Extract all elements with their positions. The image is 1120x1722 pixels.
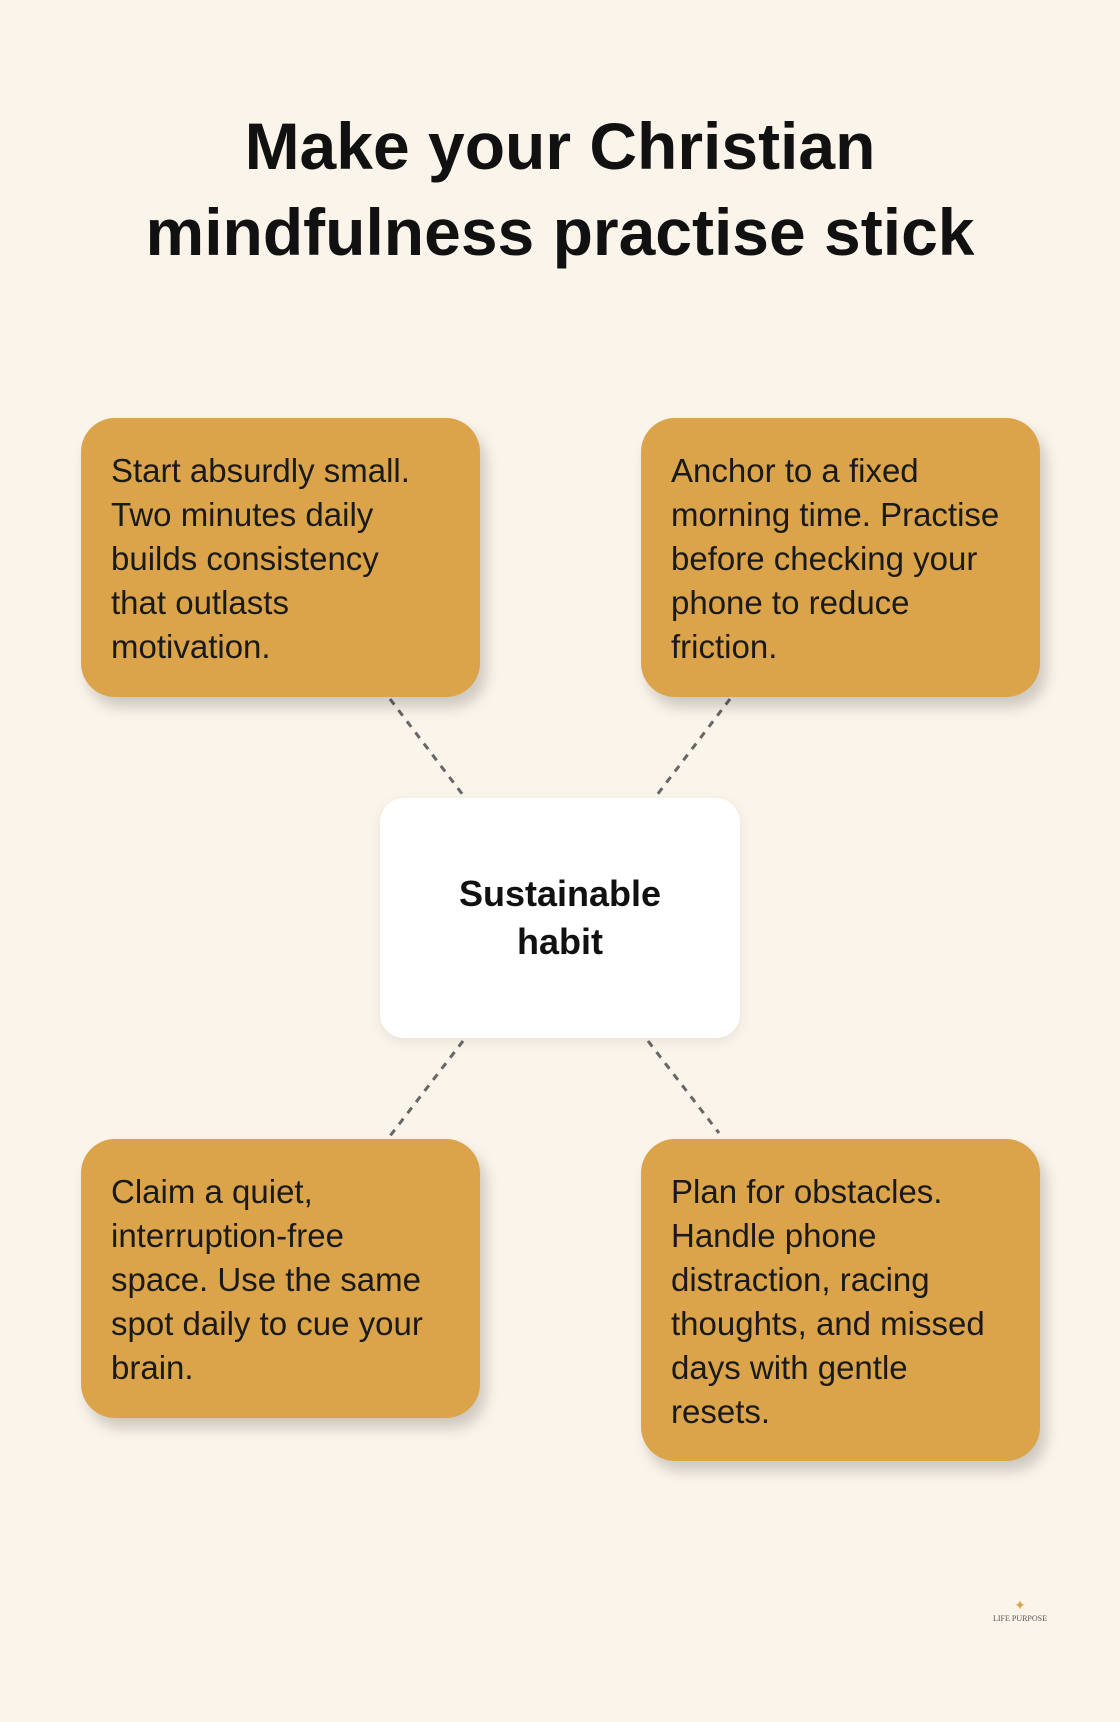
card: plan obstacles: resets. — [671, 1393, 770, 1430]
card: anchor morning — [641, 418, 1040, 697]
title: mindfulness practise stick — [146, 195, 974, 269]
card: plan obstacles: Handle phone — [671, 1217, 877, 1254]
card: start small: Two minutes daily — [111, 496, 373, 533]
card: plan obstacles: distraction, racing — [671, 1261, 930, 1298]
logo — [993, 1599, 1047, 1623]
card: start small: that outlasts — [111, 584, 289, 621]
center node — [380, 798, 740, 1038]
card: plan obstacles: Plan for obstacles. — [671, 1173, 942, 1210]
card: anchor morning: phone to reduce — [671, 584, 910, 621]
title — [146, 109, 974, 269]
card: quiet space: Claim a quiet, — [111, 1173, 313, 1210]
card: plan obstacles — [641, 1139, 1040, 1461]
card: quiet space: interruption-free — [111, 1217, 344, 1254]
center node: habit — [517, 921, 603, 962]
card: quiet space: spot daily to cue your — [111, 1305, 423, 1342]
logo: LIFE PURPOSE — [993, 1614, 1047, 1623]
card: start small: builds consistency — [111, 540, 379, 577]
card: quiet space: brain. — [111, 1349, 194, 1386]
card: quiet space: space. Use the same — [111, 1261, 421, 1298]
card: start small: Start absurdly small. — [111, 452, 410, 489]
card: plan obstacles: days with gentle — [671, 1349, 908, 1386]
card: start small: motivation. — [111, 628, 271, 665]
center node: Sustainable — [459, 873, 661, 914]
card: plan obstacles: thoughts, and missed — [671, 1305, 985, 1342]
card: anchor morning: morning time. Practise — [671, 496, 999, 533]
title: Make your Christian — [245, 109, 875, 183]
card: start small — [81, 418, 480, 697]
card: anchor morning: friction. — [671, 628, 777, 665]
card: anchor morning: before checking your — [671, 540, 977, 577]
card: quiet space — [81, 1139, 480, 1418]
card: anchor morning: Anchor to a fixed — [671, 452, 919, 489]
logo: ✦ — [1014, 1599, 1026, 1614]
